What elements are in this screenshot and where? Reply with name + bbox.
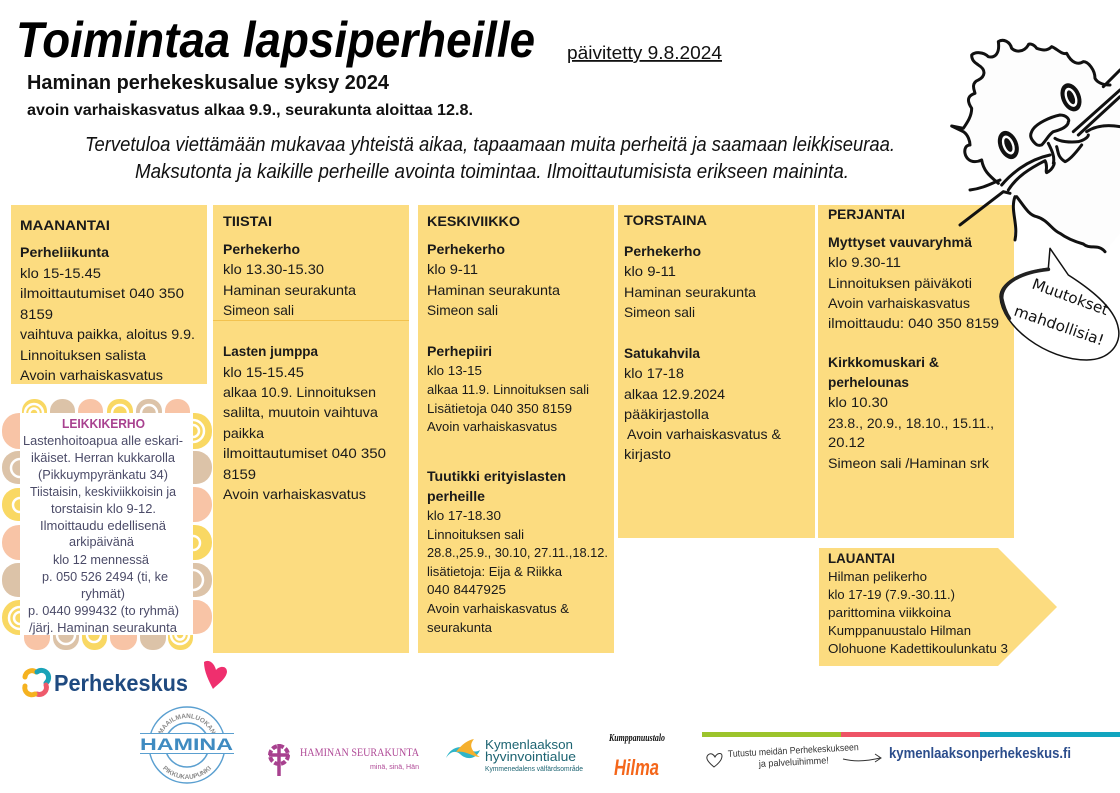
activity: Satukahvila: klo 17-18 bbox=[624, 365, 684, 381]
activity: Perhekerho: Simeon sali bbox=[624, 304, 695, 320]
activity: Satukahvila bbox=[624, 345, 782, 462]
activity: Lasten jumppa bbox=[223, 343, 386, 502]
activity: Perheliikunta: 8159 bbox=[20, 306, 53, 322]
activity: Perhekerho: Perhekerho bbox=[624, 243, 701, 259]
activity: Myttyset: Linnoituksen päiväkoti bbox=[828, 275, 972, 291]
logo: Kumppanuustalo Hilma: Hilma bbox=[614, 755, 659, 780]
activity: Lasten jumppa: klo 15-15.45 bbox=[223, 364, 304, 380]
activity: Myttyset: Myttyset vauvaryhmä bbox=[828, 234, 972, 250]
icon: heart outline bbox=[707, 753, 722, 767]
introduction bbox=[85, 134, 895, 183]
activity: Tuutikki bbox=[427, 468, 608, 635]
panel: Monday: MAANANTAI bbox=[20, 217, 110, 233]
logo: Haminan seurakunta bbox=[269, 744, 419, 776]
panel: Leikkikerho: ryhmät) bbox=[81, 586, 125, 601]
panel: Saturday arrow bbox=[819, 548, 1057, 666]
activity: Tuutikki: 28.8.,25.9., 30.10, 27.11.,18.12. bbox=[427, 545, 608, 560]
activity: Perhepiiri bbox=[427, 343, 589, 434]
activity: Tuutikki: Tuutikki erityislasten bbox=[427, 468, 566, 484]
activity: Perhepiiri: Lisätietoja 040 350 8159 bbox=[427, 401, 572, 416]
activity: Tuutikki: Linnoituksen sali bbox=[427, 527, 524, 542]
activity: Perhekerho: Simeon sali bbox=[427, 302, 498, 318]
panel: Saturday arrow: Hilman pelikerho bbox=[828, 569, 927, 584]
activity: Lasten jumppa: salilta, muutoin vaihtuva bbox=[223, 404, 378, 420]
logo: Kumppanuustalo Hilma: Kumppanuustalo bbox=[608, 733, 665, 744]
activity: Kirkkomuskari: 23.8., 20.9., 18.10., 15.11., bbox=[828, 415, 994, 431]
arrow bbox=[843, 754, 881, 762]
panel: Saturday arrow: Kumppanuustalo Hilman bbox=[828, 623, 971, 638]
subtitle: Haminan perhekeskusalue syksy 2024 bbox=[27, 72, 390, 94]
panel: Leikkikerho: p. 0440 999432 (to ryhmä) bbox=[28, 603, 179, 618]
panel: Friday: PERJANTAI bbox=[828, 206, 905, 222]
panel: Leikkikerho: LEIKKIKERHO bbox=[62, 416, 145, 431]
activity: Perhekerho: Haminan seurakunta bbox=[427, 282, 560, 298]
introduction: Tervetuloa viettämään mukavaa yhteistä aikaa, tapaamaan muita perheitä ja saamaan leikkiseuraa. bbox=[85, 134, 895, 156]
logo: Kumppanuustalo Hilma bbox=[608, 733, 665, 780]
activity: Kirkkomuskari: 20.12 bbox=[828, 434, 865, 450]
activity: Perhekerho bbox=[624, 243, 756, 320]
activity: Tuutikki: perheille bbox=[427, 488, 485, 504]
cartoon character bbox=[952, 40, 1120, 252]
activity: Lasten jumppa: ilmoittautumiset 040 350 bbox=[223, 445, 386, 461]
activity: Perheliikunta: Perheliikunta bbox=[20, 244, 109, 260]
speech bubble: changes possible bbox=[1000, 248, 1119, 360]
introduction: Maksutonta ja kaikille perheille avointa toimintaa. Ilmoittautumisista erikseen maininta. bbox=[135, 161, 849, 183]
logo: Kymenlaakson hyvinvointialue: Kymenlaakson bbox=[485, 737, 573, 752]
activity: Lasten jumppa: Avoin varhaiskasvatus bbox=[223, 486, 366, 502]
title: Toimintaa lapsiperheille bbox=[16, 12, 535, 68]
activity: Lasten jumppa: 8159 bbox=[223, 466, 256, 482]
activity: Lasten jumppa: Lasten jumppa bbox=[223, 343, 318, 359]
activity: Perheliikunta bbox=[20, 244, 195, 383]
activity: Kirkkomuskari: perhelounas bbox=[828, 374, 909, 390]
logo: Hamina: PIKKUKAUPUNKI bbox=[162, 766, 212, 779]
website address: kymenlaaksonperhekeskus.fi bbox=[889, 745, 1071, 762]
activity: Perhekerho: Simeon sali bbox=[223, 302, 294, 318]
panel: Wednesday: KESKIVIIKKO bbox=[427, 213, 520, 229]
panel: Leikkikerho: (Pikkuympyränkatu 34) bbox=[38, 467, 168, 482]
activity: Satukahvila: alkaa 12.9.2024 bbox=[624, 386, 725, 402]
logo: Kymenlaakson hyvinvointialue: hyvinvointialue bbox=[485, 749, 576, 764]
activity: Perhekerho: Haminan seurakunta bbox=[624, 284, 756, 300]
activity: Perhekerho bbox=[223, 241, 356, 318]
logo: Kymenlaakson hyvinvointialue: Kymmenedalens välfärdsområde bbox=[485, 765, 583, 773]
invitation text: Tutustu meidän Perhekeskukseen bbox=[728, 742, 859, 760]
activity: Perhepiiri: alkaa 11.9. Linnoituksen sali bbox=[427, 382, 589, 397]
banner: Perhekeskus website bbox=[702, 732, 1120, 770]
activity: Perheliikunta: ilmoittautumiset 040 350 bbox=[20, 285, 184, 301]
panel: Leikkikerho: /järj. Haminan seurakunta bbox=[29, 620, 178, 635]
activity: Perhekerho bbox=[427, 241, 560, 318]
speech bubble: changes possible: mahdollisia! bbox=[1012, 302, 1106, 349]
activity: Perhekerho: klo 9-11 bbox=[624, 263, 676, 279]
panel: Saturday arrow: LAUANTAI bbox=[828, 550, 895, 566]
activity: Lasten jumppa: paikka bbox=[223, 425, 264, 441]
start dates: avoin varhaiskasvatus alkaa 9.9., seurakunta aloittaa 12.8. bbox=[27, 102, 473, 119]
panel: Leikkikerho: klo 12 mennessä bbox=[53, 552, 150, 567]
activity: Perheliikunta: klo 15-15.45 bbox=[20, 265, 101, 281]
panel: Wednesday bbox=[418, 205, 614, 653]
logo: Perhekeskus: Perhekeskus bbox=[54, 670, 188, 696]
activity: Perhekerho: Perhekerho bbox=[223, 241, 300, 257]
logo: Hamina bbox=[140, 706, 234, 784]
panel: Leikkikerho: torstaisin klo 9-12. bbox=[51, 501, 156, 516]
activity: Perheliikunta: Linnoituksen salista bbox=[20, 347, 146, 363]
activity: Tuutikki: lisätietoja: Eija & Riikka bbox=[427, 564, 563, 579]
panel: Monday bbox=[11, 205, 207, 384]
panel: Tuesday: TIISTAI bbox=[223, 213, 272, 229]
logo: Haminan seurakunta: HAMINAN SEURAKUNTA bbox=[300, 745, 419, 759]
activity: Perhekerho: klo 9-11 bbox=[427, 261, 478, 277]
activity: Perhepiiri: Perhepiiri bbox=[427, 343, 492, 359]
panel: Leikkikerho bbox=[2, 399, 212, 650]
logo: Haminan seurakunta: minä, sinä, Hän bbox=[370, 762, 419, 771]
activity: Perheliikunta: vaihtuva paikka, aloitus 9.9. bbox=[20, 326, 195, 342]
panel: Leikkikerho: Tiistaisin, keskiviikkoisin ja bbox=[30, 484, 177, 499]
activity: Myttyset: ilmoittaudu: 040 350 8159 bbox=[828, 315, 999, 331]
activity: Tuutikki: klo 17-18.30 bbox=[427, 508, 501, 523]
panel: Tuesday bbox=[213, 205, 409, 653]
activity: Kirkkomuskari: Kirkkomuskari & bbox=[828, 354, 939, 370]
activity: Satukahvila: Satukahvila bbox=[624, 345, 700, 361]
activity: Satukahvila: pääkirjastolla bbox=[624, 406, 709, 422]
activity: Lasten jumppa: alkaa 10.9. Linnoituksen bbox=[223, 384, 376, 400]
panel: Saturday arrow: parittomina viikkoina bbox=[828, 605, 952, 620]
activity: Tuutikki: seurakunta bbox=[427, 620, 493, 635]
invitation text bbox=[728, 742, 859, 770]
activity: Perhepiiri: Avoin varhaiskasvatus bbox=[427, 419, 557, 434]
activity: Perhepiiri: klo 13-15 bbox=[427, 363, 482, 378]
panel: Thursday bbox=[618, 205, 815, 538]
activity: Perhekerho: klo 13.30-15.30 bbox=[223, 261, 324, 277]
activity: Perheliikunta: Avoin varhaiskasvatus bbox=[20, 367, 163, 383]
activity: Myttyset bbox=[828, 234, 999, 331]
activity: Kirkkomuskari: Simeon sali /Haminan srk bbox=[828, 455, 990, 471]
activity: Kirkkomuskari bbox=[828, 354, 994, 471]
activity: Perhekerho: Haminan seurakunta bbox=[223, 282, 356, 298]
panel: Thursday: TORSTAINA bbox=[624, 212, 707, 228]
activity: Kirkkomuskari: klo 10.30 bbox=[828, 394, 888, 410]
activity: Myttyset: klo 9.30-11 bbox=[828, 254, 901, 270]
activity: Satukahvila: Avoin varhaiskasvatus & bbox=[627, 426, 782, 442]
panel: Friday bbox=[818, 205, 1014, 538]
icon: heart bbox=[204, 661, 227, 689]
logo: Hamina: MAAILMANLUOKAN bbox=[158, 713, 216, 733]
activity: Perhekerho: Perhekerho bbox=[427, 241, 505, 257]
activity: Satukahvila: kirjasto bbox=[624, 446, 671, 462]
panel: Leikkikerho: ikäiset. Herran kukkarolla bbox=[31, 450, 176, 465]
logo: Kymenlaakson hyvinvointialue bbox=[446, 737, 583, 773]
logo: Hamina: HAMINA bbox=[140, 735, 233, 754]
activity: Tuutikki: Avoin varhaiskasvatus & bbox=[427, 601, 569, 616]
panel: Saturday arrow: klo 17-19 (7.9.-30.11.) bbox=[828, 587, 955, 602]
panel: Leikkikerho: Ilmoittaudu edellisenä bbox=[40, 518, 167, 533]
activity: Myttyset: Avoin varhaiskasvatus bbox=[828, 295, 970, 311]
speech bubble: changes possible: Muutokset bbox=[1030, 275, 1111, 319]
panel: Leikkikerho: p. 050 526 2494 (ti, ke bbox=[42, 569, 168, 584]
panel: Leikkikerho: Lastenhoitoapua alle eskari- bbox=[23, 433, 183, 448]
update date: päivitetty 9.8.2024 bbox=[567, 43, 722, 63]
activity: Tuutikki: 040 8447925 bbox=[427, 582, 506, 597]
panel: Leikkikerho: arkipäivänä bbox=[69, 534, 135, 549]
panel: Saturday arrow: Olohuone Kadettikoulunkatu 3 bbox=[828, 641, 1008, 656]
invitation text: ja palveluihimme! bbox=[758, 755, 829, 770]
